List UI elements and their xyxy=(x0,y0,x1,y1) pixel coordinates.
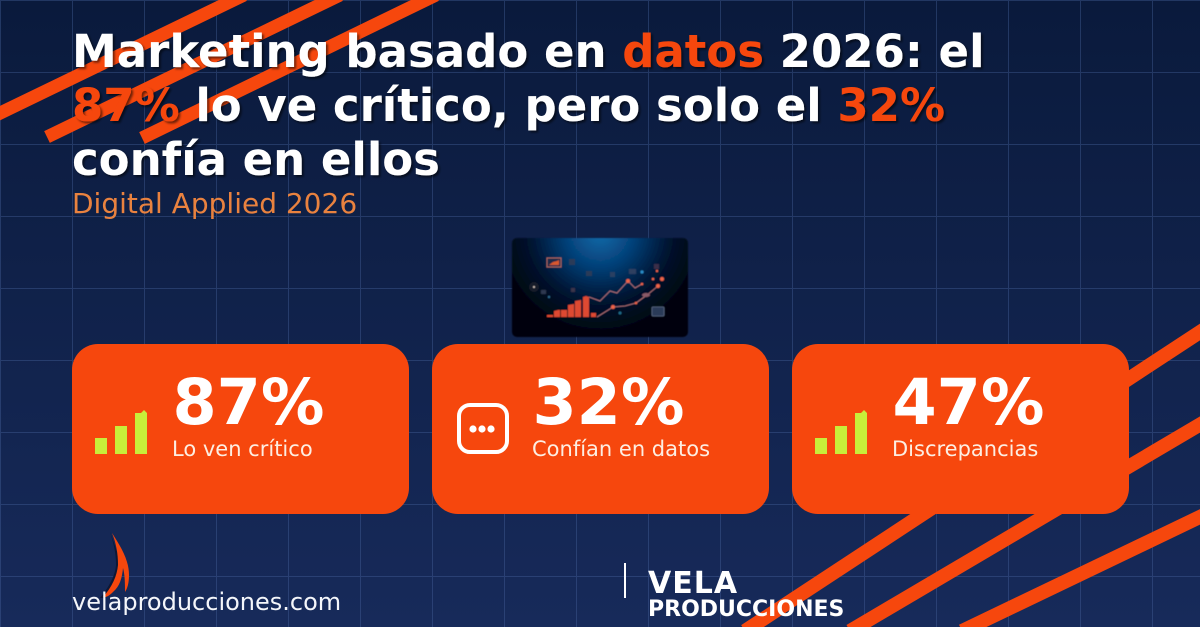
stat value: 47% xyxy=(892,365,1044,439)
divider xyxy=(624,563,626,598)
stat value: 87% xyxy=(172,365,324,439)
title: Marketing basado en datos 2026: el xyxy=(72,25,985,78)
trend lines in image xyxy=(589,281,658,317)
stat label: Lo ven crítico xyxy=(172,437,313,461)
decorative stripes: bottom right xyxy=(745,328,1200,627)
small icons in image xyxy=(529,258,664,316)
icon: rising bars xyxy=(815,410,867,454)
website url: velaproducciones.com xyxy=(72,588,341,616)
brand logotype: VELA xyxy=(648,566,738,601)
icon: sail flame logo xyxy=(100,532,129,598)
data points in image xyxy=(611,270,664,309)
icon: rising bars xyxy=(95,410,147,454)
brand logotype: PRODUCCIONES xyxy=(648,597,844,622)
stat card: 87% xyxy=(72,344,409,514)
icon: rounded square with dots xyxy=(459,405,507,452)
central image: data chart illustration xyxy=(512,238,688,337)
subtitle: source: Digital Applied 2026 xyxy=(72,187,357,220)
title: confía en ellos xyxy=(72,133,440,186)
bar chart in image xyxy=(547,296,596,317)
decorative stripes: top left xyxy=(0,0,436,138)
stat card: 32% xyxy=(432,344,769,514)
stat label: Discrepancias xyxy=(892,437,1038,461)
brand logotype xyxy=(648,566,844,622)
stat value: 32% xyxy=(532,365,684,439)
title xyxy=(72,25,985,186)
stat card: 47% xyxy=(792,344,1129,514)
title: 87% lo ve crítico, pero solo el 32% xyxy=(72,79,945,132)
stat label: Confían en datos xyxy=(532,437,710,461)
